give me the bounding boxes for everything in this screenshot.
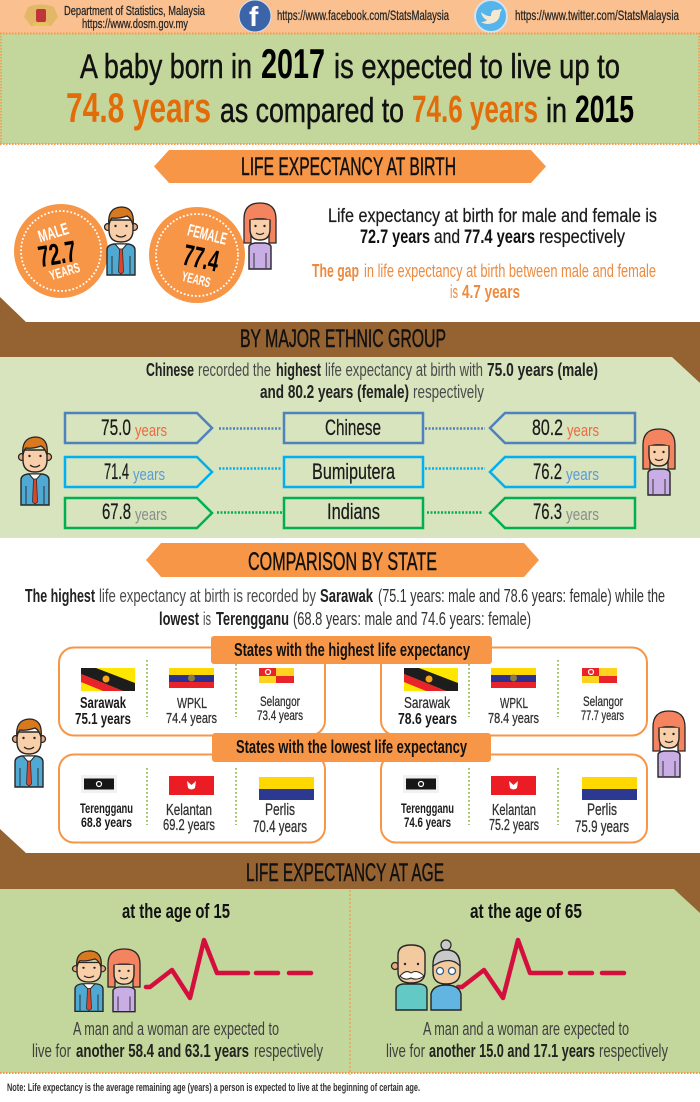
female badge: FEMALE (186, 221, 229, 249)
footnote: Note: Life expectancy is the average remaining age (years) a person is expected to live at the beginning of certain age. (7, 1082, 420, 1094)
row: Indians: Indians (327, 499, 380, 524)
row: Chinese: 80.2 (532, 415, 563, 440)
state summary text (25, 586, 665, 629)
panel: lowest, male: Kelantan (166, 802, 212, 819)
heading: age 15: at the age of 15 (122, 901, 230, 923)
state summary text: Sarawak (320, 586, 374, 606)
icon: Malaysian coat of arms (24, 4, 58, 26)
panel: ethnic group background (0, 357, 700, 538)
row: Chinese: years (567, 421, 599, 440)
male badge: 72.7 (36, 235, 79, 274)
description: age 15: another 58.4 and 63.1 years (76, 1041, 249, 1061)
panel: highest, male: 73.4 years (257, 707, 303, 723)
headline line 2: in (546, 92, 567, 130)
panel: lowest, male (59, 754, 325, 842)
description: age 65: live for (386, 1041, 425, 1061)
icon: woman (244, 203, 276, 269)
gap text (312, 261, 656, 302)
row: Chinese: 75.0 (101, 415, 131, 440)
header bar (0, 0, 700, 33)
panel: highest, male (59, 648, 325, 736)
ethnic summary text: Chinese (146, 360, 194, 380)
panel: highest, female: 77.7 years (581, 707, 624, 723)
male badge: YEARS (47, 259, 82, 283)
panel: lowest, female: 74.6 years (404, 814, 451, 830)
icon: elderly couple (392, 940, 461, 1010)
banner: by major ethnic group (0, 297, 700, 383)
icon: woman, states (653, 711, 685, 777)
description: age 15: A man and a woman are expected to (73, 1019, 279, 1039)
birth summary text: and (434, 227, 460, 248)
description: age 65 (386, 1019, 668, 1061)
facebook url: https://www.facebook.com/StatsMalaysia (277, 7, 449, 23)
panel: lowest, female: Kelantan (492, 802, 536, 819)
headline line 1: is expected to live up to (334, 48, 620, 86)
icon: elderly man (392, 945, 427, 1010)
headline line 2: 74.8 years (66, 84, 211, 131)
banner: comparison by state: COMPARISON BY STATE (248, 548, 437, 576)
row: Bumiputera (65, 457, 635, 487)
department name (64, 3, 206, 31)
panel: highest, female: 78.4 years (488, 710, 539, 727)
row: Indians: 76.3 (533, 499, 562, 524)
ethnic summary text: 75.0 years (male) (487, 360, 598, 380)
state summary text: Terengganu (216, 609, 289, 629)
icon: facebook: f (249, 1, 259, 32)
icon: man, ethnic group (18, 437, 52, 505)
ethnic summary text (146, 360, 598, 402)
state summary text: is (203, 609, 211, 629)
panel: highest, male: WPKL (177, 695, 207, 712)
panel: lowest, male: Perlis (265, 800, 295, 819)
state summary text: life expectancy at birth is recorded by (99, 586, 316, 606)
state summary text: The highest (25, 586, 95, 606)
panel: lowest, female: 75.9 years (575, 817, 629, 836)
banner: life expectancy at age (0, 829, 700, 913)
chart: heartbeat line, age 65 (458, 940, 624, 998)
label: lowest life expectancy (212, 733, 491, 762)
panel: lowest, female (381, 754, 647, 842)
headline line 1: 2017 (261, 40, 325, 87)
ethnic summary text: recorded the (198, 360, 271, 380)
row: Indians: years (135, 505, 167, 524)
female badge (149, 207, 245, 303)
icon: facebook (239, 0, 271, 32)
banner: life expectancy at birth: LIFE EXPECTANCY AT BIRTH (241, 153, 456, 181)
age 15 column (32, 901, 323, 1061)
label: highest life expectancy (211, 636, 492, 664)
row: Bumiputera: 76.2 (533, 459, 562, 484)
banner: by major ethnic group: BY MAJOR ETHNIC GROUP (240, 325, 446, 353)
description: age 15: live for (32, 1041, 71, 1061)
row: Bumiputera: years (566, 465, 599, 484)
banner: comparison by state (146, 543, 539, 577)
row: Chinese (65, 413, 635, 443)
panel: lowest, female: Terengganu (401, 800, 454, 816)
panel: lowest, male: Terengganu (80, 800, 133, 816)
ethnic summary text: respectively (413, 382, 484, 402)
state summary text: (68.8 years: male and 74.6 years: female) (293, 609, 531, 629)
headline panel (0, 33, 700, 144)
headline line 2: as compared to (220, 92, 404, 130)
row: Bumiputera: Bumiputera (312, 459, 396, 484)
row: Bumiputera: 71.4 (104, 459, 129, 484)
female badge: 77.4 (180, 239, 222, 279)
male badge: MALE (36, 219, 71, 246)
headline line 2: 2015 (575, 89, 634, 131)
department name: Department of Statistics, Malaysia (64, 3, 206, 18)
panel: lowest, male: 70.4 years (253, 817, 307, 836)
label: highest life expectancy: States with the highest life expectancy (234, 640, 470, 660)
icon: man (104, 207, 138, 275)
panel: lowest, female: Perlis (587, 800, 617, 819)
row: Indians: 67.8 (102, 499, 131, 524)
banner: life expectancy at age: LIFE EXPECTANCY AT AGE (246, 859, 444, 887)
headline line 1 (80, 40, 620, 87)
icon: woman, ethnic group (643, 429, 675, 495)
panel: lowest, male: 68.8 years (81, 814, 132, 830)
icon: young couple (72, 949, 140, 1012)
panel: highest, male: Selangor (260, 693, 300, 709)
description: age 15: respectively (254, 1041, 323, 1061)
department name: https://www.dosm.gov.my (82, 16, 188, 31)
ethnic summary text: highest (276, 360, 321, 380)
icon: elderly woman (431, 940, 461, 1010)
birth summary text (328, 206, 657, 248)
panel: highest, female: WPKL (500, 695, 528, 712)
headline line 1: A baby born in (80, 48, 252, 86)
headline line 2: 74.6 years (412, 89, 538, 131)
description: age 65: respectively (599, 1041, 668, 1061)
birth summary text: respectively (539, 227, 625, 248)
heading: age 65: at the age of 65 (470, 901, 582, 923)
panel: life expectancy at age background (0, 889, 700, 1073)
birth summary text: 72.7 years (360, 227, 430, 248)
panel: highest, male: 74.4 years (166, 710, 217, 727)
row: Indians: years (566, 505, 599, 524)
panel: highest, female: 78.6 years (398, 711, 457, 728)
panel: lowest, female: 75.2 years (489, 817, 539, 834)
panel: highest, female (381, 648, 647, 736)
panel: highest, male: Sarawak (80, 695, 126, 712)
icon: twitter (475, 0, 507, 32)
male badge (14, 204, 108, 298)
description: age 65: another 15.0 and 17.1 years (429, 1041, 595, 1061)
row: Bumiputera: years (133, 465, 165, 484)
row: Chinese: Chinese (325, 415, 381, 440)
age 65 column (386, 901, 668, 1061)
banner: life expectancy at birth (154, 150, 546, 183)
panel: lowest, male: 69.2 years (163, 817, 215, 834)
gap text: 4.7 years (462, 282, 520, 302)
panel: highest, male: 75.1 years (75, 711, 131, 728)
panel: highest, female: Sarawak (404, 695, 451, 712)
birth summary text: 77.4 years (464, 227, 535, 248)
gap text: is (450, 282, 458, 302)
panel: highest, female: Selangor (583, 693, 623, 709)
label: lowest life expectancy: States with the lowest life expectancy (236, 737, 467, 757)
gap text: The gap (312, 261, 359, 281)
chart: heartbeat line, age 15 (146, 940, 311, 998)
icon: man, states (12, 719, 46, 787)
female badge: YEARS (180, 268, 212, 290)
row: Indians (65, 498, 635, 528)
headline line 2 (66, 84, 634, 131)
state summary text: lowest (159, 609, 199, 629)
ethnic summary text: and 80.2 years (female) (260, 382, 409, 402)
ethnic summary text: life expectancy at birth with (325, 360, 483, 380)
description: age 15 (32, 1019, 323, 1061)
row: Chinese: years (135, 421, 167, 440)
